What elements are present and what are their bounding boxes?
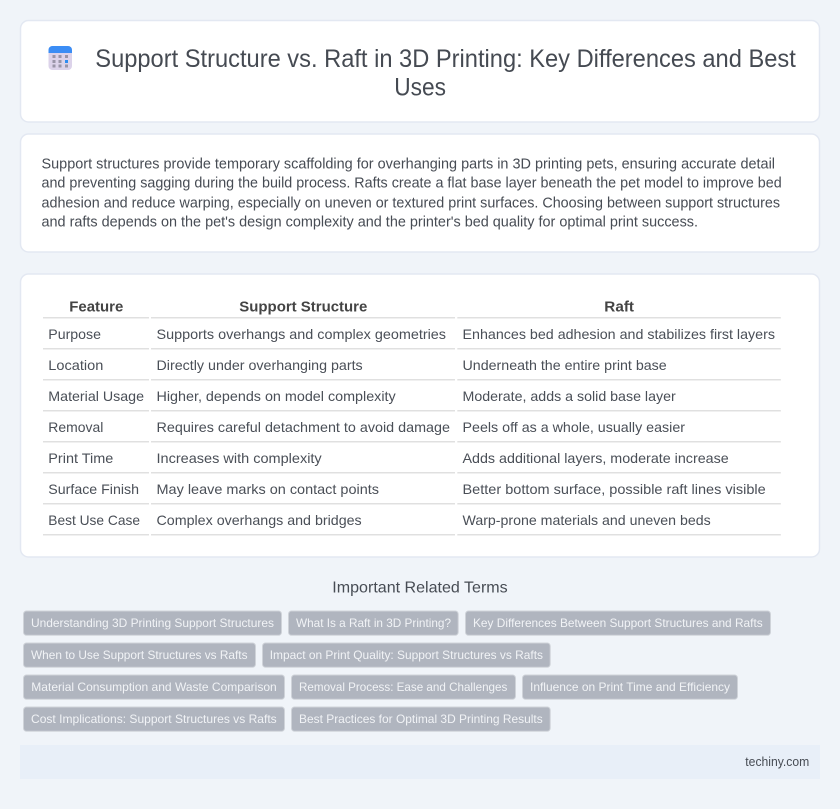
tag bbox=[292, 707, 550, 731]
row: location bbox=[43, 357, 781, 380]
row: purpose: Purpose bbox=[48, 326, 101, 342]
tag: Impact on Print Quality: Support Structures vs Rafts bbox=[270, 648, 543, 662]
row: print time: Increases with complexity bbox=[156, 450, 322, 466]
heading: related terms: Important Related Terms bbox=[332, 580, 508, 597]
table header: Feature bbox=[69, 300, 123, 316]
intro paragraph: adhesion and reduce warping, especially on uneven or textured print surfaces. Choosing between support structures bbox=[42, 195, 780, 211]
tag: What Is a Raft in 3D Printing? bbox=[296, 616, 451, 630]
panel: introduction bbox=[20, 134, 820, 252]
row: location: Underneath the entire print base bbox=[462, 357, 667, 373]
intro paragraph: and rafts depends on the pet's design complexity and the printer's bed quality for optimal print success. bbox=[42, 215, 698, 231]
tag: When to Use Support Structures vs Rafts bbox=[31, 648, 248, 662]
row: location: Directly under overhanging parts bbox=[156, 357, 363, 373]
tag bbox=[24, 675, 284, 699]
intro paragraph bbox=[42, 156, 782, 231]
footer bbox=[20, 745, 820, 779]
tag bbox=[466, 611, 770, 635]
intro paragraph: Support structures provide temporary scaffolding for overhanging parts in 3D printing pets, ensuring accurate detail bbox=[42, 156, 775, 172]
table header: Support Structure bbox=[239, 300, 367, 316]
row: surface finish: May leave marks on contact points bbox=[156, 481, 379, 497]
tag bbox=[24, 707, 284, 731]
tag: Understanding 3D Printing Support Structures bbox=[31, 616, 274, 630]
row: print time: Print Time bbox=[48, 450, 114, 466]
row: best use case: Warp-prone materials and uneven beds bbox=[462, 512, 711, 528]
panel: title card bbox=[20, 20, 820, 122]
row: surface finish: Surface Finish bbox=[48, 481, 139, 497]
tag: Removal Process: Ease and Challenges bbox=[299, 680, 507, 694]
row: material usage: Moderate, adds a solid base layer bbox=[462, 388, 676, 404]
related term tags bbox=[24, 611, 770, 731]
title: Support Structure vs. Raft in 3D Printing: Key Differences and Best bbox=[95, 45, 796, 73]
tag bbox=[288, 611, 458, 635]
tag: Best Practices for Optimal 3D Printing Results bbox=[299, 712, 543, 726]
row: removal: Peels off as a whole, usually easier bbox=[462, 419, 685, 435]
tag: Key Differences Between Support Structures and Rafts bbox=[473, 616, 763, 630]
footer: techiny.com bbox=[745, 754, 809, 769]
intro paragraph: and preventing sagging during the build process. Rafts create a flat base layer beneath the pet model to improve bed bbox=[42, 176, 782, 192]
row: best use case: Complex overhangs and bridges bbox=[156, 512, 362, 528]
row: print time bbox=[43, 450, 781, 474]
row: material usage bbox=[43, 388, 781, 412]
title bbox=[95, 45, 796, 102]
tag bbox=[292, 675, 516, 699]
row: print time: Adds additional layers, moderate increase bbox=[462, 450, 729, 466]
row: best use case: Best Use Case bbox=[48, 512, 140, 528]
title: Uses bbox=[394, 74, 446, 102]
tag: Cost Implications: Support Structures vs Rafts bbox=[31, 712, 277, 726]
table header: Raft bbox=[604, 300, 634, 316]
row: location: Location bbox=[48, 357, 103, 373]
row: surface finish: Better bottom surface, possible raft lines visible bbox=[462, 481, 766, 497]
row: purpose bbox=[43, 326, 781, 350]
tag bbox=[262, 643, 550, 667]
tag: Influence on Print Time and Efficiency bbox=[530, 680, 730, 694]
tag bbox=[24, 643, 256, 667]
tag: Material Consumption and Waste Comparison bbox=[31, 680, 277, 694]
row: best use case bbox=[43, 512, 781, 536]
row: purpose: Enhances bed adhesion and stabilizes first layers bbox=[462, 326, 775, 342]
tag bbox=[24, 611, 282, 635]
row: material usage: Higher, depends on model complexity bbox=[156, 388, 396, 404]
row: surface finish bbox=[43, 481, 781, 504]
tag bbox=[522, 675, 738, 699]
row: removal: Requires careful detachment to avoid damage bbox=[156, 419, 450, 435]
table header bbox=[43, 300, 781, 318]
row: removal bbox=[43, 419, 781, 442]
icon: calendar bbox=[48, 46, 72, 70]
row: material usage: Material Usage bbox=[48, 388, 144, 404]
panel: comparison table bbox=[20, 274, 820, 557]
row: removal: Removal bbox=[48, 419, 103, 435]
row: purpose: Supports overhangs and complex geometries bbox=[156, 326, 446, 342]
